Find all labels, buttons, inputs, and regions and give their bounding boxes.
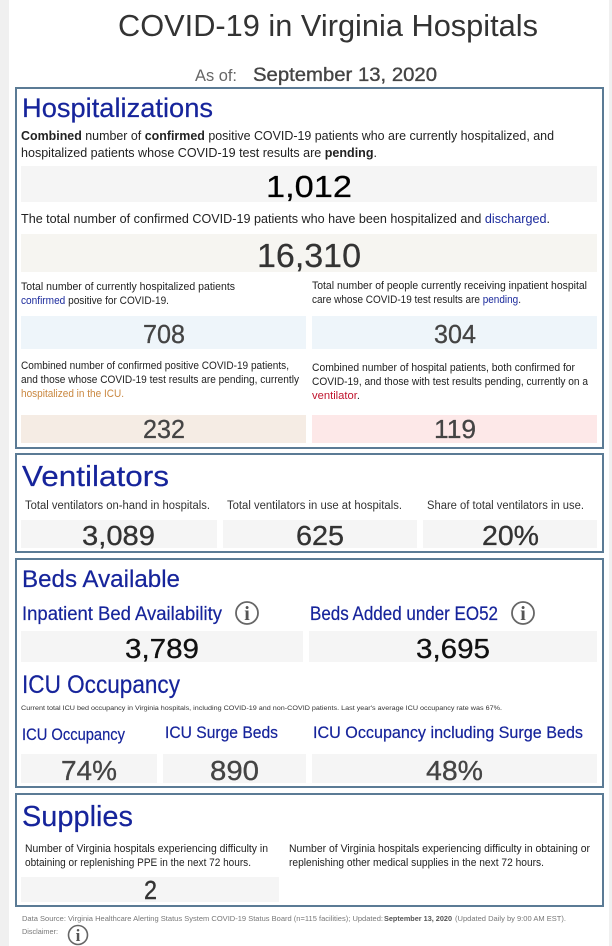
panel: hospitalizations <box>16 88 603 448</box>
text: combined description: Combined number of confirmed positive COVID-19 patients who are currently hospitalized, and <box>21 129 554 143</box>
text: pending description <box>312 280 587 306</box>
stat: 625 <box>223 520 417 551</box>
text: confirmed description <box>21 281 236 307</box>
stat: 304 pending <box>312 316 597 349</box>
stat: 2 <box>21 875 279 905</box>
text: ventilator description: COVID-19, and those with test results pending, currently on a <box>312 376 588 388</box>
stat: 708 confirmed <box>21 316 306 349</box>
stat: 232 ICU <box>21 414 306 444</box>
footer: data source: September 13, 2020 <box>384 914 452 923</box>
stat: 3,789 <box>21 631 303 664</box>
label: ICU occupancy including surge beds: ICU Occupancy including Surge Beds <box>313 724 583 742</box>
text: ventilator description: Combined number of hospital patients, both confirmed for <box>312 362 575 374</box>
text: ventilator description <box>312 362 588 402</box>
stat: 708 confirmed: 708 <box>143 319 185 349</box>
heading: ICU occupancy: ICU Occupancy <box>22 671 180 699</box>
text: combined description <box>21 129 554 160</box>
icon: info: i <box>244 603 250 625</box>
footer: data source: (Updated Daily by 9:00 AM EST). <box>455 914 566 923</box>
stat: 16,310 discharged: 16,310 <box>257 237 361 274</box>
text: ventilator description: ventilator. <box>312 390 360 402</box>
label: beds added under EO52: Beds Added under EO52 <box>310 604 498 625</box>
text: ICU description <box>21 360 300 400</box>
stat: 304 pending: 304 <box>434 319 476 349</box>
icon: disclaimer info <box>68 926 88 945</box>
text: pending description: care whose COVID-19 test results are pending. <box>312 294 521 306</box>
text: ICU description: hospitalized in the ICU. <box>21 388 124 400</box>
stat: 48%: 48% <box>426 755 483 786</box>
stat: 3,789: 3,789 <box>125 633 199 664</box>
heading: hospitalizations: Hospitalizations <box>22 93 213 123</box>
stat: 20% <box>423 520 597 551</box>
panel: ventilators <box>16 454 603 552</box>
as-of date: As of: <box>195 66 237 85</box>
as-of date: September 13, 2020 <box>253 64 437 86</box>
heading: supplies: Supplies <box>22 801 133 833</box>
stat: 48% <box>312 754 597 786</box>
icon: info <box>236 602 258 625</box>
text: other supplies description: replenishing other medical supplies in the next 72 hours. <box>289 857 544 869</box>
stat: 1,012 hospitalized: 1,012 <box>266 169 352 204</box>
stat: 16,310 discharged <box>21 234 597 274</box>
heading: ventilators: Ventilators <box>22 461 169 493</box>
stat: 625: 625 <box>296 520 344 551</box>
icon: disclaimer info: i <box>76 926 81 945</box>
stat: 3,089: 3,089 <box>82 520 155 551</box>
text: PPE description: obtaining or replenishing PPE in the next 72 hours. <box>25 857 251 869</box>
text: combined description: hospitalized patients whose COVID-19 test results are pending. <box>21 146 377 160</box>
stat: 20%: 20% <box>482 520 539 551</box>
label: ICU occupancy: ICU Occupancy <box>22 726 126 744</box>
text: discharged description: The total number of confirmed COVID-19 patients who have been hospitalized and discharged. <box>21 212 550 226</box>
text: pending description: Total number of people currently receiving inpatient hospital <box>312 280 587 292</box>
text: ICU occupancy note: Current total ICU bed occupancy in Virginia hospitals, including COVID-19 and non-COVID patients. Last year's average ICU occupancy rate was 67%. <box>21 705 502 712</box>
text: PPE description: Number of Virginia hospitals experiencing difficulty in <box>25 843 268 855</box>
stat: 890 <box>163 754 306 786</box>
label: ICU surge beds: ICU Surge Beds <box>165 724 278 742</box>
label: ventilators on-hand: Total ventilators on-hand in hospitals. <box>25 500 210 512</box>
footer: data source <box>22 914 566 936</box>
stat: 1,012 hospitalized <box>21 166 597 204</box>
stat: 3,695: 3,695 <box>416 633 490 664</box>
text: other supplies description <box>289 843 590 869</box>
heading: beds available: Beds Available <box>22 566 180 593</box>
panel: supplies <box>16 794 603 906</box>
text: confirmed description: Total number of currently hospitalized patients <box>21 281 236 293</box>
stat: 890: 890 <box>210 755 259 786</box>
stat: 74% <box>21 754 157 786</box>
label: ventilators in use: Total ventilators in use at hospitals. <box>227 500 402 512</box>
panel: beds available <box>16 559 603 787</box>
title: COVID-19 in Virginia Hospitals <box>118 8 538 43</box>
stat: 74%: 74% <box>61 755 117 786</box>
text: ICU description: Combined number of confirmed positive COVID-19 patients, <box>21 360 289 372</box>
stat: 2: 2 <box>144 875 157 905</box>
text: confirmed description: confirmed positive for COVID-19. <box>21 295 169 307</box>
stat: 119 ventilator <box>312 414 597 444</box>
icon: info <box>512 602 534 625</box>
stat: 3,695 <box>309 631 597 664</box>
text: other supplies description: Number of Virginia hospitals experiencing difficulty in obtaining or <box>289 843 590 855</box>
label: share in use: Share of total ventilators in use. <box>427 500 584 512</box>
text: PPE description <box>25 843 268 869</box>
footer: data source: Data Source: Virginia Healthcare Alerting Status System COVID-19 Status Board (n=115 facilities); Updated: <box>22 914 383 923</box>
stat: 119 ventilator: 119 <box>434 414 476 444</box>
stat: 3,089 <box>21 520 217 551</box>
footer: data source: Disclaimer: <box>22 927 58 936</box>
stat: 232 ICU: 232 <box>143 414 185 444</box>
icon: info: i <box>520 603 526 625</box>
text: ICU description: and those whose COVID-19 test results are pending, currently <box>21 374 300 386</box>
label: inpatient bed availability: Inpatient Bed Availability <box>22 604 222 625</box>
